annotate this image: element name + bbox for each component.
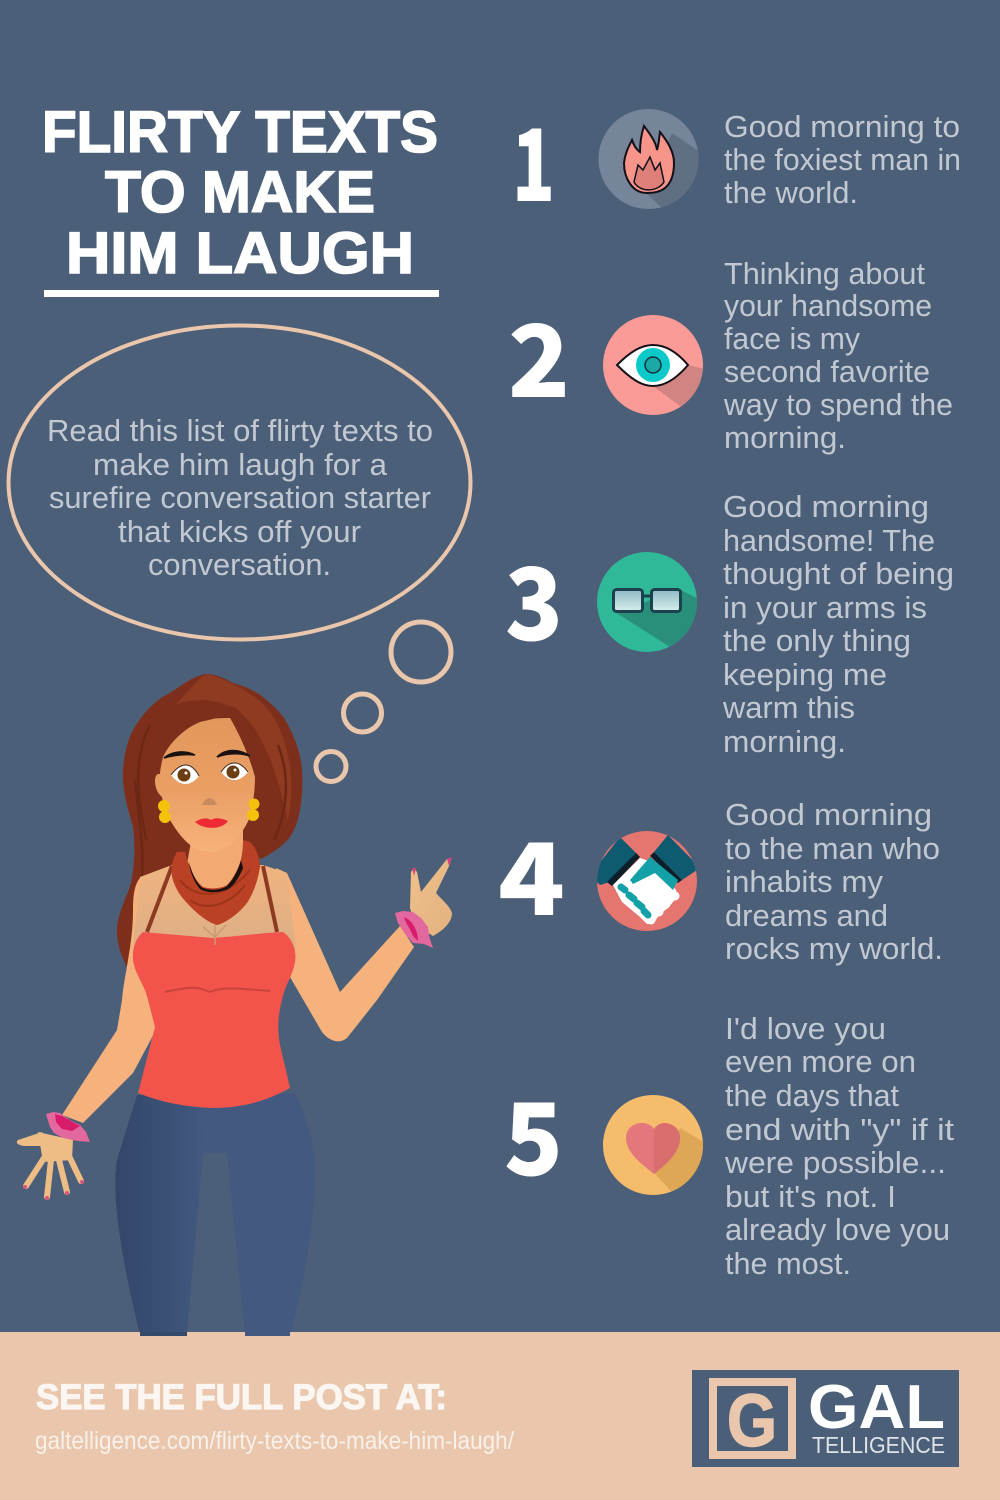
text 3: the only thing (723, 623, 911, 658)
text 5: I'd love you (725, 1011, 886, 1046)
number 2: 2 (508, 281, 570, 426)
text 3: morning. (723, 724, 846, 759)
title: HIM LAUGH (66, 221, 414, 286)
right scrunchie (395, 911, 433, 948)
text 4: Good morning (725, 797, 932, 832)
logo: GAL (808, 1373, 945, 1442)
thought bubble: conversation. (148, 547, 331, 582)
scarf (172, 840, 260, 925)
item 1 (518, 109, 959, 209)
thought bubble (8, 326, 470, 782)
text 4: to the man who (725, 831, 940, 866)
woman illustration (17, 674, 452, 1335)
text 5 (724, 1011, 954, 1281)
footer band (0, 1332, 1000, 1500)
footer url: galtelligence.com/flirty-texts-to-make-him-laugh/ (35, 1427, 514, 1455)
text 3: thought of being (723, 556, 954, 591)
title (42, 100, 439, 297)
icon: glasses (597, 552, 700, 655)
red top (133, 932, 295, 1108)
straps (147, 866, 277, 932)
text 4: rocks my world. (725, 931, 943, 966)
text 5: end with "y" if it (725, 1112, 954, 1147)
text 5: already love you (725, 1212, 950, 1247)
number 3: 3 (505, 524, 563, 669)
text 3: in your arms is (723, 590, 927, 625)
item 3 (505, 489, 954, 759)
footer call to action: SEE THE FULL POST AT: (36, 1378, 447, 1417)
logo: TELLIGENCE (812, 1432, 945, 1458)
text 3: warm this (722, 690, 855, 725)
icon: flame (598, 109, 700, 215)
number 5: 5 (504, 1059, 563, 1204)
text 2: way to spend the (723, 387, 953, 422)
right hand (410, 858, 452, 936)
title: TO MAKE (105, 160, 375, 225)
logo: G (727, 1379, 777, 1462)
eyes (164, 750, 250, 784)
item 2 (508, 256, 953, 455)
icon: eye (603, 315, 705, 415)
number 1: 1 (512, 85, 555, 230)
text 3 (722, 489, 954, 759)
text 4: dreams and (725, 898, 888, 933)
text 2: second favorite (724, 354, 930, 389)
thought bubble: Read this list of flirty texts to (47, 413, 433, 448)
hair fringe (163, 705, 264, 805)
title: FLIRTY TEXTS (42, 100, 438, 165)
face (155, 718, 255, 852)
thought bubble: that kicks off your (118, 514, 361, 549)
icon: handshake (590, 831, 700, 931)
text 2: Thinking about (724, 256, 925, 291)
neck (186, 825, 243, 892)
text 4: inhabits my (725, 864, 883, 899)
number 4: 4 (498, 799, 565, 944)
item 4 (498, 797, 943, 966)
thought bubble: surefire conversation starter (49, 480, 431, 515)
text 2: face is my (724, 321, 860, 356)
left hand (17, 1132, 84, 1200)
text 3: handsome! The (723, 523, 935, 558)
logo (692, 1370, 959, 1467)
text 1: the world. (724, 175, 858, 210)
text 5: but it's not. I (725, 1179, 896, 1214)
hair (117, 674, 302, 972)
left scrunchie (46, 1112, 90, 1142)
text 1: Good morning to (724, 109, 960, 144)
nose and lips (202, 798, 217, 805)
text 5: were possible... (724, 1145, 946, 1180)
torso skin (133, 865, 296, 950)
right arm (276, 868, 414, 1041)
thought bubble: make him laugh for a (93, 447, 388, 482)
jeans (115, 1093, 315, 1335)
text 1: the foxiest man in (724, 142, 961, 177)
text 4 (725, 797, 943, 966)
left arm (62, 876, 156, 1123)
earrings (158, 798, 260, 823)
text 2 (723, 256, 953, 455)
text 1 (724, 109, 961, 210)
text 2: your handsome (724, 288, 932, 323)
item 5 (504, 1011, 954, 1281)
text 3: Good morning (723, 489, 929, 524)
text 5: even more on (725, 1044, 916, 1079)
text 2: morning. (724, 420, 846, 455)
icon: heart (603, 1095, 705, 1200)
text 3: keeping me (723, 657, 887, 692)
text 5: the most. (725, 1246, 851, 1281)
text 5: the days that (725, 1078, 899, 1113)
